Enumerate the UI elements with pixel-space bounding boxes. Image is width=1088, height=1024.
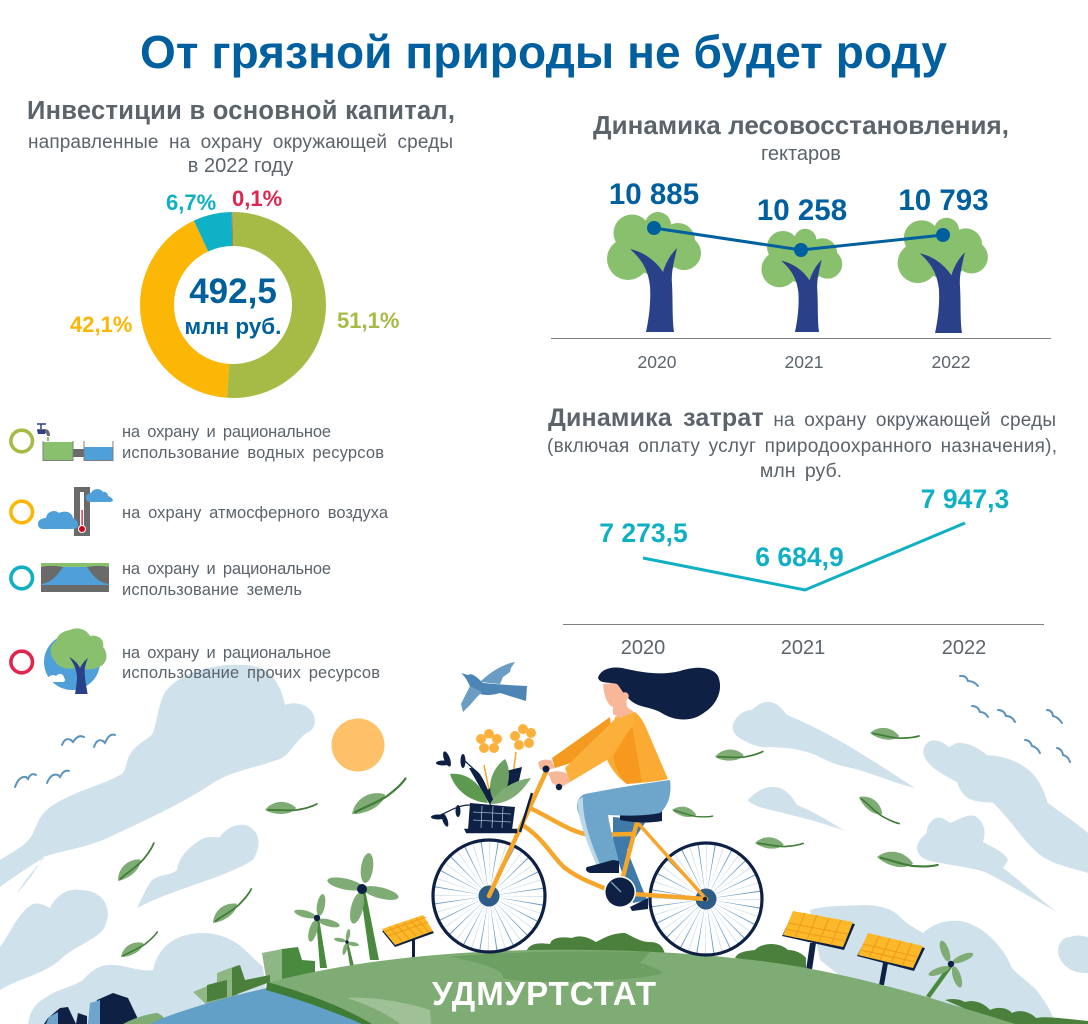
reforestation values bbox=[609, 178, 989, 227]
reforestation values: 10 258 bbox=[757, 194, 847, 227]
legend item: water bbox=[11, 423, 384, 462]
water and shore bbox=[150, 982, 372, 1024]
axis bbox=[551, 338, 1051, 339]
tree 2021 bbox=[761, 229, 842, 332]
expenditure values bbox=[599, 484, 1009, 572]
legend item: water: на охрану и рациональное bbox=[122, 423, 331, 441]
title: От грязной природы не будет роду bbox=[140, 26, 947, 78]
donut total: 492,5 bbox=[189, 272, 277, 311]
legend item: other resources: на охрану и рациональное bbox=[122, 644, 331, 662]
heading: expenditure: Динамика затрат на охрану окружающей среды bbox=[548, 404, 1056, 432]
reforestation values: 10 793 bbox=[898, 184, 989, 217]
flower basket bbox=[431, 724, 536, 832]
bushes bbox=[526, 933, 1088, 1024]
year labels: 2021 bbox=[781, 637, 825, 659]
panel: reforestation chart bbox=[551, 110, 1051, 372]
ear bbox=[621, 692, 629, 700]
year labels: 2021 bbox=[785, 352, 823, 372]
trousers bbox=[577, 780, 671, 864]
bicycle seat bbox=[620, 810, 662, 823]
legend item: other resources bbox=[11, 628, 380, 694]
legend bbox=[11, 423, 389, 694]
hair bbox=[598, 667, 720, 720]
hill shading bbox=[347, 951, 663, 1024]
subheading: investments bbox=[28, 132, 453, 177]
year labels: 2020 bbox=[621, 637, 665, 659]
year labels bbox=[621, 637, 986, 659]
rear leg bbox=[613, 817, 648, 911]
legend item: other resources: использование прочих ресурсов bbox=[122, 664, 380, 682]
expenditure values: 7 273,5 bbox=[599, 518, 688, 548]
neck and face bbox=[603, 682, 634, 718]
heading: expenditure: (включая оплату услуг природоохранного назначения), bbox=[547, 436, 1057, 457]
donut percent labels: 42,1% bbox=[70, 312, 132, 337]
reforestation values: 10 885 bbox=[609, 178, 699, 211]
flying leaves bbox=[113, 726, 939, 960]
heading: expenditure: млн руб. bbox=[760, 460, 842, 482]
panel: expenditure chart bbox=[547, 404, 1057, 659]
legend item: air bbox=[11, 487, 389, 536]
panel: investments donut bbox=[27, 97, 455, 381]
subheading: investments: направленные на охрану окружающей среды bbox=[28, 132, 453, 153]
bicycle with rider bbox=[431, 667, 762, 955]
bicycle wheels bbox=[433, 840, 762, 955]
wind turbines bbox=[293, 852, 975, 998]
scenic background illustration bbox=[0, 665, 1088, 1024]
tree 2020 bbox=[607, 212, 701, 332]
legend item: land: использование земель bbox=[122, 581, 302, 599]
donut chart bbox=[157, 229, 309, 381]
expenditure line bbox=[643, 523, 965, 590]
heading: reforestation: Динамика лесовосстановления, bbox=[593, 110, 1009, 140]
heading: investments: Инвестиции в основной капитал, bbox=[27, 97, 455, 125]
city buildings bbox=[44, 947, 315, 1024]
bicycle frame bbox=[489, 772, 706, 899]
donut percent labels: 51,1% bbox=[337, 308, 399, 333]
subheading: hectares: гектаров bbox=[761, 143, 841, 165]
year labels: 2022 bbox=[942, 637, 986, 659]
expenditure values: 7 947,3 bbox=[921, 484, 1009, 514]
legend item: land bbox=[11, 560, 331, 599]
year labels: 2020 bbox=[638, 352, 677, 372]
front pedal and chainring bbox=[604, 876, 707, 908]
expenditure values: 6 684,9 bbox=[755, 542, 844, 572]
donut total: млн руб. bbox=[185, 314, 281, 339]
year labels: 2022 bbox=[932, 352, 970, 372]
solar panels bbox=[382, 911, 925, 985]
hands and handlebar bbox=[538, 760, 570, 790]
shoe bbox=[586, 860, 619, 873]
line with points bbox=[647, 221, 950, 257]
sun bbox=[332, 718, 384, 772]
donut total bbox=[185, 272, 281, 339]
legend item: land: на охрану и рациональное bbox=[122, 560, 331, 578]
gull birds bbox=[15, 676, 1070, 787]
legend item: air: на охрану атмосферного воздуха bbox=[122, 504, 389, 522]
organisation name: УДМУРТСТАТ bbox=[432, 975, 656, 1012]
donut percent labels: 0,1% bbox=[232, 186, 282, 211]
subheading: investments: в 2022 году bbox=[188, 155, 293, 177]
green hill bbox=[267, 950, 1015, 1024]
tree 2022 bbox=[898, 218, 988, 333]
clouds bbox=[0, 665, 1088, 1024]
year labels bbox=[638, 352, 970, 372]
axis bbox=[563, 624, 1044, 625]
legend item: water: использование водных ресурсов bbox=[122, 444, 384, 462]
donut percent labels bbox=[70, 186, 399, 337]
heading: expenditure bbox=[547, 404, 1057, 482]
sweater and arms bbox=[552, 712, 668, 784]
donut percent labels: 6,7% bbox=[166, 190, 216, 215]
blue bird bbox=[461, 662, 527, 712]
